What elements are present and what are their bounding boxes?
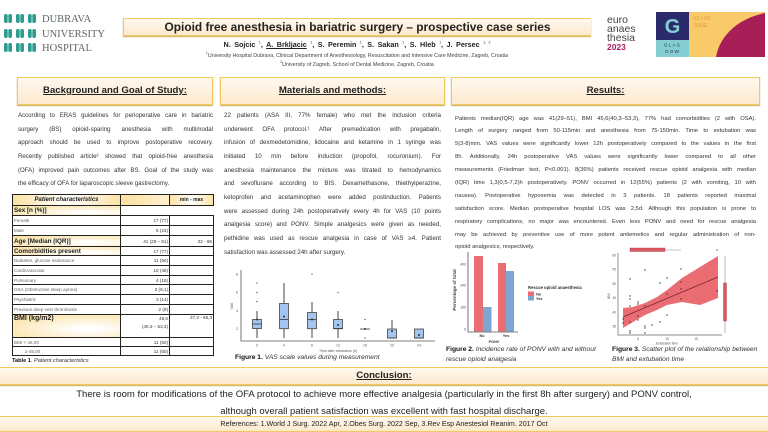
text: background and goal: the efficacy of OFA for laparoscopic sleeve gastrectomy. bbox=[18, 180, 169, 187]
table: patient characteristics: Diabetes, glucose intolerance bbox=[14, 258, 74, 263]
text: background and goal bbox=[18, 112, 213, 187]
heading: results: Results: bbox=[587, 85, 624, 96]
caption: figure 3 bbox=[612, 346, 757, 362]
chart: figure 2 PONV bar chart: No bbox=[479, 334, 485, 338]
logo: Dubrava University Hospital: DUBRAVA bbox=[42, 14, 91, 25]
chart: figure 2 PONV bar chart: 100 bbox=[460, 306, 466, 310]
chart: figure 3 BMI vs extubation scatter: 35 bbox=[612, 324, 616, 328]
chart: figure 2 PONV bar chart: Yes bbox=[536, 297, 543, 301]
heading: background and goal: Background and Goal of Study: bbox=[43, 85, 187, 96]
heading: conclusion bbox=[0, 367, 768, 385]
text: materials and methods: pethidine was used as rescue analgesia in case of VAS ≥4. Patient bbox=[224, 235, 441, 242]
table: patient characteristics: BMI (kg/m2) bbox=[14, 315, 54, 322]
table: patient characteristics: 22 - 66 bbox=[198, 238, 212, 244]
heading: materials and methods bbox=[220, 77, 445, 105]
logo: Dubrava University Hospital: UNIVERSITY bbox=[42, 28, 105, 40]
text: background and goal: According to ERAS guidelines for perioperative care in bariatric bbox=[18, 112, 213, 119]
table: patient characteristics: 17 (77) bbox=[153, 218, 168, 223]
logo: Glasgow 03-05 June: G bbox=[665, 16, 680, 38]
table: patient characteristics: Cardiovascular bbox=[14, 268, 45, 273]
table: patient characteristics: 5 (23) bbox=[156, 228, 168, 233]
table: patient characteristics: Psychiatric bbox=[14, 297, 36, 302]
affiliations bbox=[206, 51, 508, 68]
chart: figure 1 VAS box plot: VAS bbox=[230, 302, 234, 309]
chart: figure 2 PONV bar chart: 0 bbox=[464, 328, 466, 332]
table: patient characteristics: Sex [n (%)] bbox=[14, 207, 47, 214]
text: results: Patients median(IQR) age was 41(29–51), BMI 45,6(40,3–53,3), 77% had comorbidities (2 with OSA). bbox=[455, 116, 756, 122]
authors: N. Sojcic 1, A. Brkljacic 1, S. Peremin 1, S. Sakan 1, S. Hleb 1, J. Persec 1, 2 bbox=[224, 40, 490, 49]
text: materials and methods: were assessed during 24h postoperatively every 4h for VAS (10 points bbox=[224, 208, 441, 215]
chart: figure 2 PONV bar chart: Yes bbox=[503, 334, 509, 338]
table: patient characteristics: 17 (77) bbox=[153, 248, 168, 254]
chart: figure 3 BMI vs extubation scatter: 40 bbox=[612, 310, 616, 314]
table: patient characteristics: (40,3 – 53,3) bbox=[142, 324, 168, 329]
table: patient characteristics: 41 (29 – 51) bbox=[143, 238, 168, 244]
text: results: nausea). Postoperative hypoxemia was detected in 3 patients. 18 patients reported maximal bbox=[455, 193, 756, 199]
chart: figure 3 BMI vs extubation scatter: 60 bbox=[612, 254, 616, 258]
caption: figure 2 bbox=[446, 346, 596, 362]
chart: figure 1 VAS box plot: 8 bbox=[236, 272, 238, 276]
text: results: satisfaction score. Median postoperative hospital LOS was 2,5d. Although this population is prone to bbox=[455, 206, 756, 212]
chart: figure 1 VAS box plot: 4 bbox=[236, 309, 238, 313]
text: results: Length of surgery ranged from 50-115min and anesthesia from 75-150min. Time to extubation was bbox=[455, 128, 756, 134]
table: patient characteristics: Patient characteristics bbox=[34, 197, 99, 203]
logo: euroanaesthesia 2023: thesia bbox=[607, 32, 635, 44]
heading: conclusion: Conclusion: bbox=[356, 370, 412, 381]
chart: figure 1 VAS box plot: 24 bbox=[417, 344, 421, 348]
chart: figure 1 VAS box plot: 20 bbox=[390, 344, 394, 348]
text: results: may be achieved by preventive use of more potent antiemetics and regular administration of non- bbox=[455, 232, 756, 238]
table: patient characteristics: min - max bbox=[180, 197, 203, 203]
table: patient characteristics: 2 (9) bbox=[159, 307, 168, 312]
text: background and goal: (OFA) improved pain outcomes after BS. Goal of the study was bbox=[18, 167, 213, 174]
chart: figure 2 PONV bar chart: Percentage of total bbox=[452, 269, 457, 311]
text: results: 5(3-8)min. VAS values were significantly lower 12h postoperatively compared to the values in the first bbox=[455, 141, 756, 147]
caption: figure 2: Figure 2. Incidence rate of PONV with and without bbox=[446, 346, 596, 352]
table: patient characteristics: Female bbox=[14, 218, 29, 223]
table: patient characteristics: Previous deep vein thrombosis bbox=[14, 307, 77, 312]
chart: figure 2 PONV bar chart: 400 bbox=[460, 262, 466, 266]
logo: Glasgow 03-05 June: GLAS bbox=[664, 42, 681, 48]
chart: figure 3 BMI vs extubation scatter: 15 bbox=[694, 337, 698, 341]
chart: figure 1 VAS box plot: 8 bbox=[311, 344, 313, 348]
text: materials and methods: initiated 10 min before induction (propofol, rocuronium). For bbox=[224, 153, 441, 160]
text: materials and methods: analgesia score) and PONV. Simple analgesics were given as needed, bbox=[224, 221, 441, 228]
logo: Glasgow 03-05 June: GOW bbox=[665, 49, 680, 54]
text: conclusion: although overall patient satisfaction was excellent with fast hospital discharge. bbox=[220, 406, 548, 417]
affiliations: 2University of Zagreb, School of Dental Medicine, Zagreb, Croatia bbox=[280, 60, 434, 68]
table: patient characteristics: 10 (45) bbox=[153, 268, 168, 273]
table: patient characteristics: 45,6 bbox=[159, 316, 168, 321]
chart: figure 1 VAS box plot: 4 bbox=[283, 344, 285, 348]
text: materials and methods: underwent OFA protocol.¹ After premedication with pregabalin, bbox=[224, 126, 441, 133]
chart: figure 1 VAS box plot: Time after extubation (h) bbox=[319, 349, 357, 353]
title: Opioid free anesthesia in bariatric surgery – prospective case series bbox=[165, 20, 550, 34]
table: patient characteristics: Male bbox=[14, 228, 24, 233]
text: conclusion: There is room for modifications of the OFA protocol to achieve more effective analgesia (particularly in the first 8h after surgery) and PONV control, bbox=[76, 389, 692, 400]
chart: figure 2 PONV bar chart: 200 bbox=[460, 284, 466, 288]
text: results: 8h. Additionally, 24h postoperative VAS values were significantly lower compared to all other bbox=[455, 154, 756, 160]
logo: Glasgow 03-05 June bbox=[656, 12, 765, 57]
table: patient characteristics: 2 (9,1) bbox=[155, 287, 168, 292]
chart: figure 2 PONV bar chart: Rescue opioid anaesthesia bbox=[528, 285, 582, 290]
table: patient characteristics bbox=[12, 194, 214, 356]
logo: euroanaesthesia 2023: euro bbox=[607, 14, 628, 26]
text: background and goal: Recently published article² showed that opioid-free anesthesia bbox=[18, 153, 213, 160]
chart: figure 1 VAS box plot bbox=[230, 270, 435, 353]
text: results: opioid analgesics, respectively. bbox=[455, 244, 534, 250]
chart: figure 1 VAS box plot: 6 bbox=[236, 290, 238, 294]
chart: figure 3 BMI vs extubation scatter: 5 bbox=[637, 337, 639, 341]
caption: figure 1: Figure 1. VAS scale values during measurement bbox=[235, 354, 380, 361]
chart: figure 3 BMI vs extubation scatter: 50 bbox=[612, 282, 616, 286]
table: patient characteristics: BMI < 45,00 bbox=[14, 340, 39, 344]
logo: euroanaesthesia 2023: anaes bbox=[607, 23, 636, 35]
logo: Dubrava University Hospital: HOSPITAL bbox=[42, 43, 92, 54]
references bbox=[0, 416, 768, 432]
chart: figure 3 BMI vs extubation scatter: 45 bbox=[612, 296, 616, 300]
text: materials and methods: infusion of dexmedetomidine, lidocaine and ketamine in 1 syringe was bbox=[224, 139, 441, 146]
table: patient characteristics: 37,3 - 65,3 bbox=[190, 315, 212, 320]
table: patient characteristics: ≥ 45,00 bbox=[25, 348, 40, 354]
table: patient characteristics: Age [Median (IQR)] bbox=[14, 238, 71, 244]
logo: euroanaesthesia 2023: 2023 bbox=[607, 42, 626, 52]
references: References: 1.World J Surg. 2022 Apr, 2.Obes Surg. 2022 Sep, 3.Rev Esp Anestesiol Reanim. 2017 Oct bbox=[220, 420, 548, 428]
text: materials and methods: satisfaction was assessed 24h after surgery. bbox=[224, 249, 345, 256]
text: materials and methods bbox=[224, 112, 441, 256]
text: materials and methods: and sevoflurane according to BIS. Dexamethasone, thiethylperazine, bbox=[224, 180, 441, 187]
chart: figure 3 BMI vs extubation scatter: 10 bbox=[665, 337, 669, 341]
caption: figure 3: BMI and extubation time bbox=[612, 356, 684, 362]
chart: figure 1 VAS box plot: 0 bbox=[256, 344, 258, 348]
table: patient characteristics: 4 (18) bbox=[156, 278, 168, 282]
table: patient characteristics: 3 (14) bbox=[156, 297, 168, 302]
table: patient characteristics: Pulmonary bbox=[14, 278, 36, 282]
chart: figure 1 VAS box plot: 12 bbox=[336, 344, 340, 348]
text: materials and methods: anesthesia maintenance the mixture was titrated to hemodynamics bbox=[224, 167, 441, 174]
logo: euroanaesthesia 2023 bbox=[607, 14, 636, 52]
text: results: (IQR) time 1,3(0,5-7,2)h postoperatively. PONV occurred in 12(55%) patients (2 with vomiting, 10 with bbox=[455, 180, 756, 186]
logo: Dubrava University Hospital bbox=[4, 14, 105, 54]
caption: figure 3: Figure 3. Scatter plot of the relationship between bbox=[612, 346, 757, 352]
heading: results bbox=[451, 77, 760, 105]
heading: materials and methods: Materials and methods: bbox=[279, 85, 386, 96]
text: background and goal: approach should be used to improve postoperative recovery. bbox=[18, 139, 213, 146]
caption: figure 2: rescue opioid analgesia bbox=[446, 356, 516, 362]
table: patient characteristics: 11 (50) bbox=[154, 348, 168, 354]
chart: figure 3 BMI vs extubation scatter: BMI bbox=[607, 293, 611, 299]
text: materials and methods: 22 patients (ASA III, 77% female) who met the inclusion criteria bbox=[224, 112, 441, 119]
table: patient characteristics: 11 (50) bbox=[154, 258, 168, 263]
chart: figure 1 VAS box plot: 16 bbox=[363, 344, 367, 348]
text: conclusion bbox=[76, 389, 692, 417]
text: materials and methods: ketoprofen and acetaminophen were added postinduction. Patients bbox=[224, 194, 441, 201]
table: patient characteristics: Comorbidities present bbox=[14, 248, 81, 254]
chart: figure 2 PONV bar chart bbox=[452, 252, 582, 344]
table: patient characteristics: 11 (50) bbox=[154, 340, 168, 344]
affiliations: 1University Hospital Dubrava, Clinical Department of Anesthesiology, Resuscitation and Intensive Care Medicine, Zagreb, Croatia bbox=[206, 51, 508, 58]
chart: figure 2 PONV bar chart: No bbox=[536, 292, 542, 296]
caption: table 1: Table 1. Patient characteristics bbox=[12, 358, 89, 364]
chart: figure 3 BMI vs extubation scatter bbox=[607, 248, 727, 345]
text: results bbox=[455, 116, 756, 250]
chart: figure 3 BMI vs extubation scatter: 55 bbox=[612, 268, 616, 272]
text: background and goal: surgery (BS) opioid-sparing anesthesia with multimodal bbox=[18, 126, 213, 133]
table: patient characteristics: OSA (Obstructive sleep apnea) bbox=[14, 287, 77, 292]
title bbox=[123, 18, 591, 36]
chart: figure 2 PONV bar chart: PONV bbox=[489, 340, 500, 344]
heading: background and goal bbox=[17, 77, 213, 105]
logo: Glasgow 03-05 June: JUNE bbox=[693, 23, 708, 29]
text: results: measurements (Friedman test, P<0.001). 8(36%) patients received rescue opioid analgesia with median bbox=[455, 167, 756, 173]
logo: Glasgow 03-05 June: 03 • 05 bbox=[693, 16, 711, 22]
chart: figure 1 VAS box plot: 2 bbox=[236, 327, 238, 331]
text: results: respiratory complications, no major was encountered. Even less PONV and need for rescue analgesia bbox=[455, 219, 756, 225]
